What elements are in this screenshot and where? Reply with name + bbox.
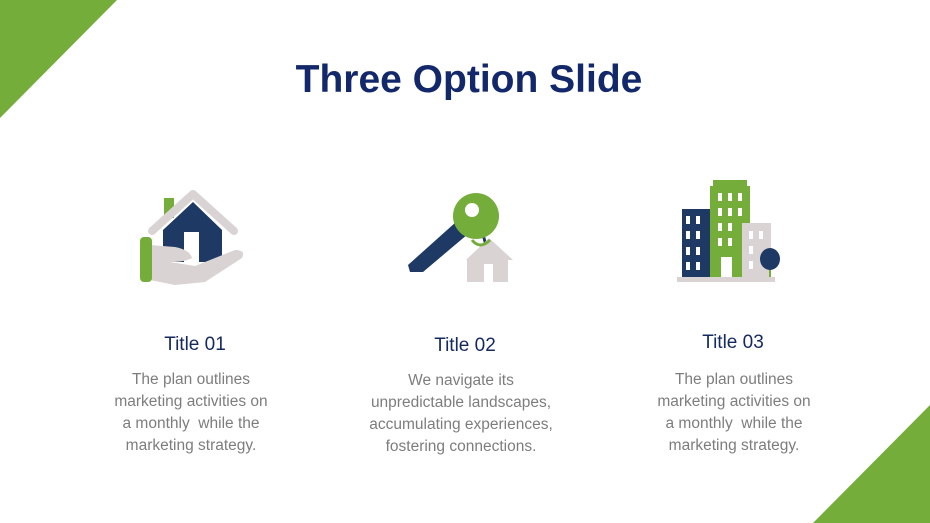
column 3 text: marketing activities on (657, 393, 811, 410)
corner triangle bottom-right (813, 405, 930, 523)
column 1 text: a monthly while the (122, 415, 260, 432)
column 2 text: fostering connections. (386, 438, 536, 455)
title: Three Option Slide (296, 58, 642, 101)
icon: key with house tag (408, 193, 513, 282)
column 1 text: marketing strategy. (126, 437, 256, 454)
column 1 text (114, 371, 268, 454)
column 3 text: marketing strategy. (669, 437, 799, 454)
column 2 text (369, 372, 553, 455)
column 3 text (657, 371, 811, 454)
column 2 text: unpredictable landscapes, (371, 394, 551, 411)
column 2 title: Title 02 (434, 335, 496, 356)
column 2 text: accumulating experiences, (369, 416, 553, 433)
icon: house in hand (140, 190, 243, 285)
column 1 text: The plan outlines (132, 371, 250, 388)
corner triangle top-left (0, 0, 117, 118)
column 3 title: Title 03 (702, 332, 764, 353)
column 2 text: We navigate its (408, 372, 514, 389)
icon: city buildings (677, 180, 780, 282)
column 1 title: Title 01 (164, 334, 226, 355)
column 3 text: The plan outlines (675, 371, 793, 388)
column 3 text: a monthly while the (666, 415, 802, 432)
column 1 text: marketing activities on (114, 393, 268, 410)
